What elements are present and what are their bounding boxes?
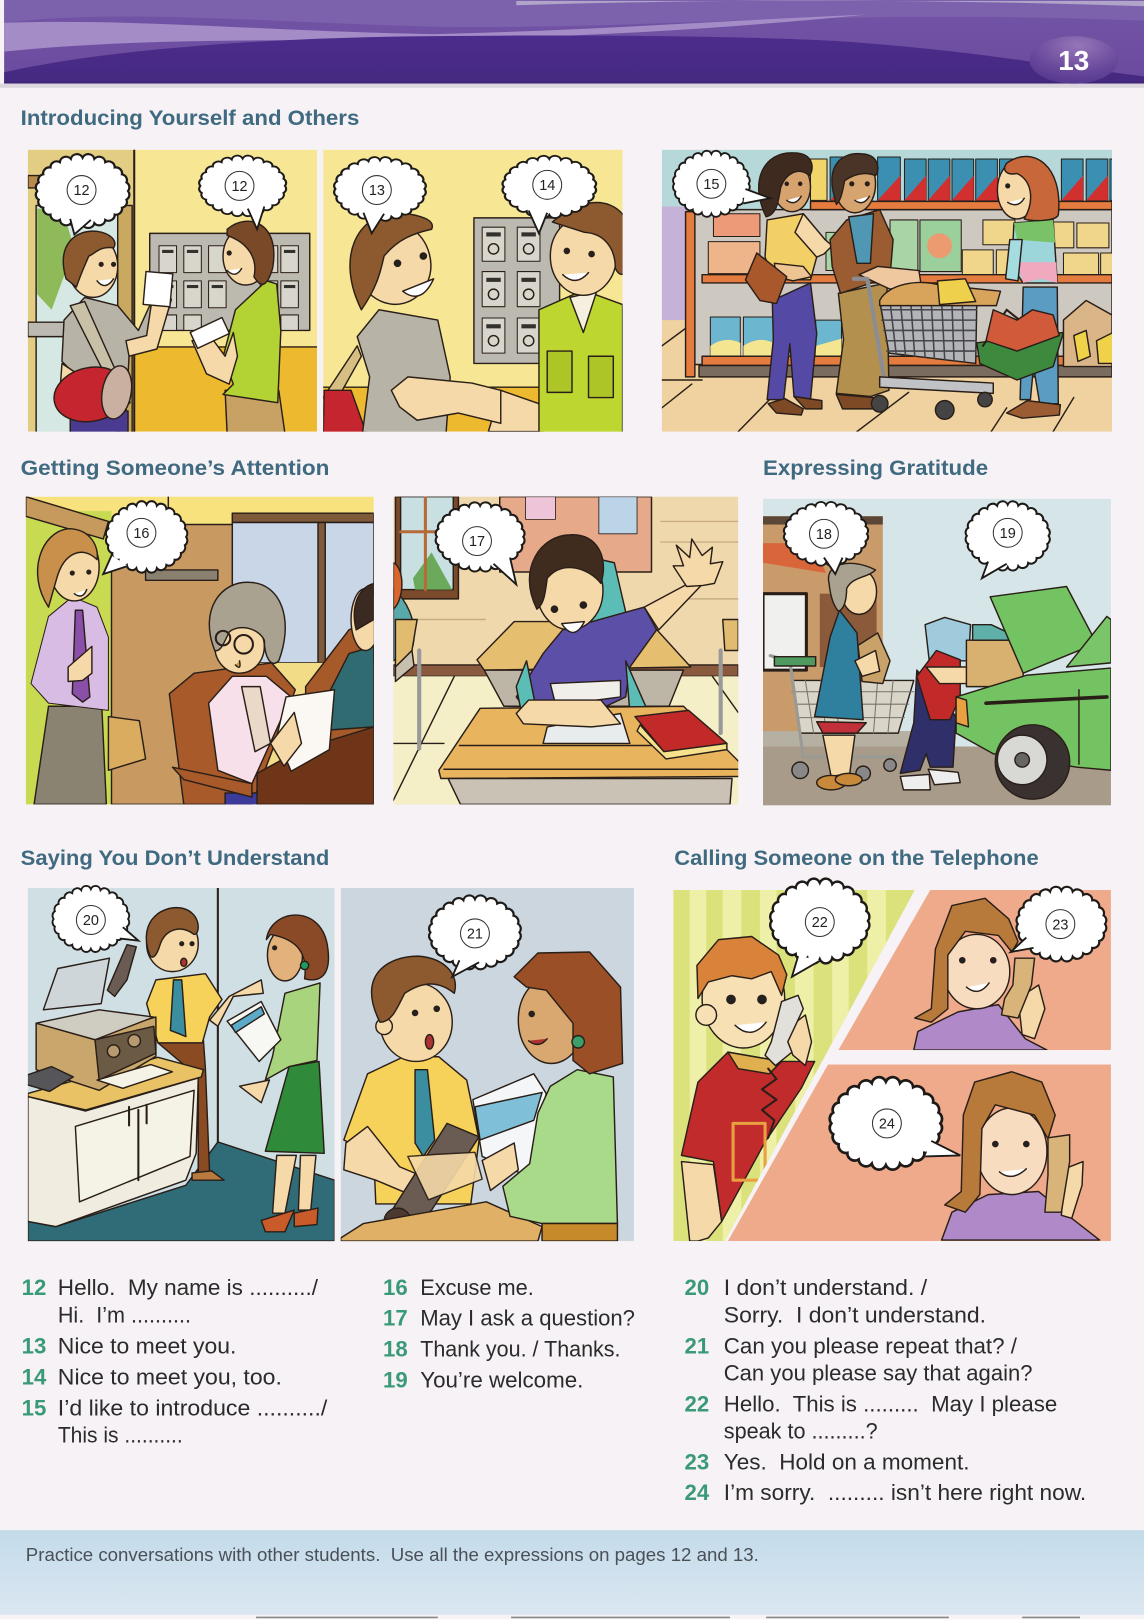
expression list: column 1: 13 — [22, 1334, 46, 1359]
expression list: column 1: I’d like to introduce ........../ — [58, 1396, 328, 1421]
speech bubble 13 — [334, 157, 426, 233]
expression list: column 3: 23 — [685, 1449, 709, 1474]
speech bubble 18 — [784, 502, 868, 574]
speech bubble 12 right: 12 — [232, 179, 248, 195]
speech bubble 12 left — [36, 154, 129, 234]
heading: saying you don't understand: Saying You Don’t Understand — [21, 845, 329, 870]
speech bubble 17 — [436, 502, 525, 584]
expression list: column 3: Can you please say that again? — [724, 1360, 1032, 1385]
expression list: column 3: 24 — [685, 1480, 710, 1505]
speech bubble 13: 13 — [369, 183, 385, 199]
panel: thanking grocery helper — [763, 499, 1111, 805]
panel: mailboxes, two people greeting — [28, 150, 317, 437]
expression list: column 1: This is .......... — [58, 1422, 183, 1447]
speech bubble 23 — [1011, 887, 1106, 961]
heading: gratitude: Expressing Gratitude — [763, 455, 988, 480]
expression list: column 1: Hi. I’m .......... — [58, 1303, 191, 1328]
expression list: column 3: Can you please repeat that? / — [724, 1334, 1018, 1359]
expression list: column 1: 12 — [22, 1275, 46, 1300]
panel: man and woman close-up — [341, 888, 634, 1241]
speech bubble 18: 18 — [816, 527, 832, 543]
expression list: column 3: Hello. This is ......... May I please — [724, 1391, 1057, 1416]
panel: supermarket introduction — [662, 150, 1132, 432]
speech bubble 15: 15 — [703, 177, 719, 193]
speech bubble 14 — [503, 156, 596, 233]
expression list: column 1: 14 — [22, 1365, 47, 1390]
expression list: column 3: Yes. Hold on a moment. — [724, 1449, 970, 1474]
panel: man excusing himself at office door — [26, 497, 380, 807]
panel: woman answering the telephone — [838, 890, 1111, 1050]
expression list: column 3: 22 — [685, 1391, 709, 1416]
speech bubble 24: 24 — [879, 1117, 895, 1133]
expression list: column 1: Hello. My name is ........../ — [58, 1275, 319, 1300]
speech bubble 22: 22 — [812, 915, 828, 931]
speech bubble 22 — [770, 879, 869, 977]
expression list: column 1 — [22, 1275, 328, 1447]
expression list: column 3: I’m sorry. ......... isn’t here right now. — [724, 1480, 1086, 1505]
speech bubble 16: 16 — [133, 526, 149, 542]
expression list: column 2: 16 — [383, 1275, 408, 1300]
header band — [0, 0, 1144, 88]
speech bubble 20: 20 — [83, 913, 99, 929]
speech bubble 15 — [673, 151, 770, 217]
speech bubble 23: 23 — [1052, 917, 1068, 933]
heading: introducing: Introducing Yourself and Others — [21, 105, 359, 130]
speech bubble 24 — [830, 1077, 960, 1170]
expression list: column 2: Excuse me. — [420, 1275, 534, 1300]
heading: attention: Getting Someone’s Attention — [21, 455, 329, 480]
panel: handshake between two men — [323, 150, 631, 434]
expression list: column 3: I don’t understand. / — [724, 1275, 928, 1300]
speech bubble 21: 21 — [467, 927, 483, 943]
panel: student raising hand in classroom — [393, 497, 744, 804]
speech bubble 16 — [103, 501, 187, 574]
footer band — [0, 1530, 1144, 1615]
page number — [1029, 36, 1118, 84]
speech bubble 21 — [429, 895, 521, 977]
expression list: column 3: 21 — [685, 1334, 709, 1359]
expression list: column 3: speak to .........? — [724, 1418, 878, 1443]
page number: 13 — [1058, 45, 1089, 76]
speech bubble 14: 14 — [539, 178, 555, 194]
expression list: column 2: 19 — [383, 1368, 408, 1393]
panel: boy on the telephone — [673, 890, 921, 1241]
speech bubble 12 right — [199, 156, 286, 229]
expression list: column 3 — [685, 1275, 1086, 1505]
speech bubble 17: 17 — [469, 534, 485, 550]
expression list: column 2 — [383, 1275, 635, 1393]
expression list: column 1: Nice to meet you. — [58, 1334, 236, 1359]
speech bubble 19: 19 — [1000, 526, 1016, 542]
panel: man at photocopier — [22, 888, 335, 1241]
expression list: column 2: You’re welcome. — [420, 1368, 583, 1393]
panel: woman saying person is away — [728, 1065, 1111, 1241]
speech bubble 12 left: 12 — [74, 183, 90, 199]
expression list: column 1: Nice to meet you, too. — [58, 1365, 282, 1390]
speech bubble 19 — [966, 501, 1050, 578]
footer instruction: Practice conversations with other students. Use all the expressions on pages 12 and 13. — [26, 1544, 759, 1565]
expression list: column 3: Sorry. I don’t understand. — [724, 1303, 986, 1328]
speech bubble 20 — [53, 886, 138, 952]
expression list: column 2: 17 — [383, 1306, 408, 1331]
expression list: column 1: 15 — [22, 1396, 46, 1421]
expression list: column 2: May I ask a question? — [420, 1306, 635, 1331]
expression list: column 2: Thank you. / Thanks. — [420, 1337, 621, 1362]
heading: telephone: Calling Someone on the Telephone — [674, 845, 1039, 870]
expression list: column 3: 20 — [685, 1275, 709, 1300]
expression list: column 2: 18 — [383, 1337, 408, 1362]
